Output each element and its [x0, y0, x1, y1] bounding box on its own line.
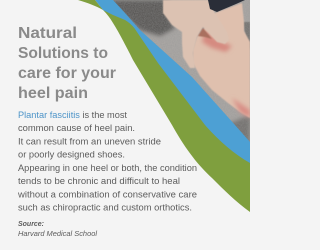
source credit: Harvard Medical School [18, 231, 97, 238]
title [18, 25, 116, 102]
source credit [18, 221, 97, 238]
title: care for your [18, 65, 116, 82]
photo: hand holding heel [100, 0, 250, 170]
body text: It can result from an uneven stride [18, 136, 161, 146]
body text: tends to be chronic and difficult to heal [18, 176, 180, 186]
dark shirt [208, 0, 245, 12]
body text: common cause of heel pain. [18, 123, 135, 133]
body text: or poorly designed shoes. [18, 150, 125, 160]
body text [17, 110, 197, 212]
redness on heel [202, 30, 232, 52]
foot [193, 3, 250, 118]
title: heel pain [18, 85, 88, 102]
white text panel [0, 0, 250, 250]
green curved band [78, 0, 250, 225]
infographic canvas [17, 0, 250, 238]
body text: Appearing in one heel or both, the condition [18, 163, 197, 173]
body text: such as chiropractic and custom orthotics. [18, 202, 192, 212]
title: Solutions to [18, 45, 108, 62]
body text: Plantar fasciitis is the most [18, 110, 128, 120]
hand [163, 0, 229, 68]
body text: without a combination of conservative care [17, 190, 197, 200]
blue curved band [95, 0, 250, 175]
title: Natural [18, 25, 77, 42]
carpet background [100, 0, 250, 170]
source credit: Source: [18, 221, 44, 228]
